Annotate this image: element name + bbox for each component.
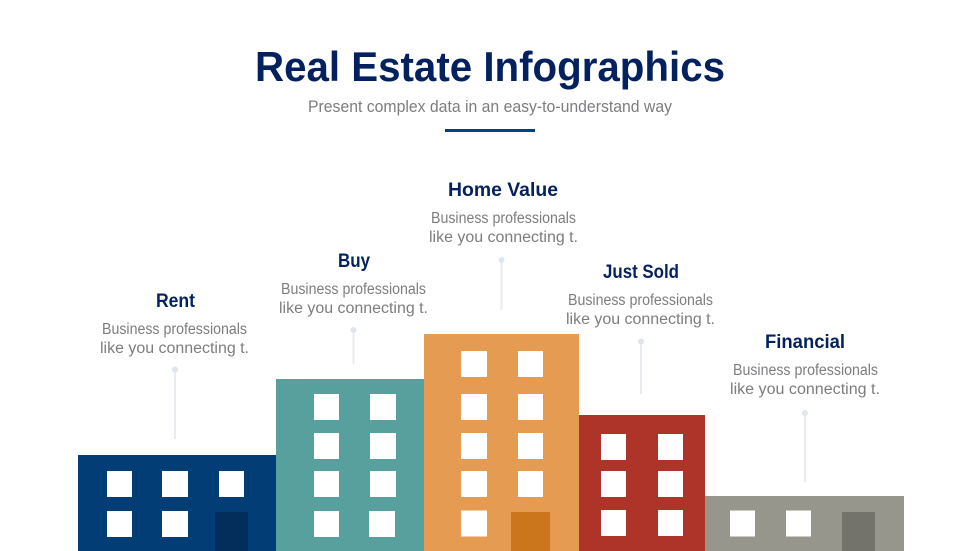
building: Buy (teal) — [276, 379, 424, 551]
label: Financial — [730, 332, 880, 398]
label: Rent: Business professionals — [102, 321, 247, 338]
building: Just Sold (red) — [579, 415, 705, 551]
title: Real Estate Infographics — [255, 43, 725, 90]
connector: Just Sold — [638, 338, 644, 394]
label: Just Sold: like you connecting t. — [566, 311, 715, 328]
label: Home Value: like you connecting t. — [429, 229, 578, 246]
connector: Rent — [172, 366, 178, 439]
label: Buy: Buy — [338, 251, 370, 272]
building: Financial (gray) — [705, 496, 904, 551]
label: Rent: Rent — [156, 291, 196, 312]
label: Just Sold: Business professionals — [568, 292, 713, 309]
label: Rent: like you connecting t. — [100, 340, 249, 357]
subtitle: Present complex data in an easy-to-understand way — [308, 98, 673, 116]
label: Buy — [279, 251, 428, 317]
building: Home Value (orange) — [424, 334, 579, 551]
label: Buy: like you connecting t. — [279, 300, 428, 317]
connector: Financial — [802, 410, 808, 482]
label: Buy: Business professionals — [281, 281, 426, 298]
label: Home Value: Home Value — [448, 180, 558, 201]
label: Home Value: Business professionals — [431, 210, 576, 227]
title underline — [445, 129, 535, 132]
connector: Buy — [350, 327, 356, 364]
label: Financial: like you connecting t. — [730, 381, 880, 398]
connector: Home Value — [498, 257, 504, 310]
label: Home Value — [429, 180, 578, 246]
label: Rent — [100, 291, 249, 357]
label: Just Sold: Just Sold — [603, 262, 679, 283]
label: Just Sold — [566, 262, 715, 328]
building: Rent (blue) — [78, 455, 276, 551]
label: Financial: Business professionals — [733, 362, 878, 379]
label: Financial: Financial — [765, 332, 845, 353]
